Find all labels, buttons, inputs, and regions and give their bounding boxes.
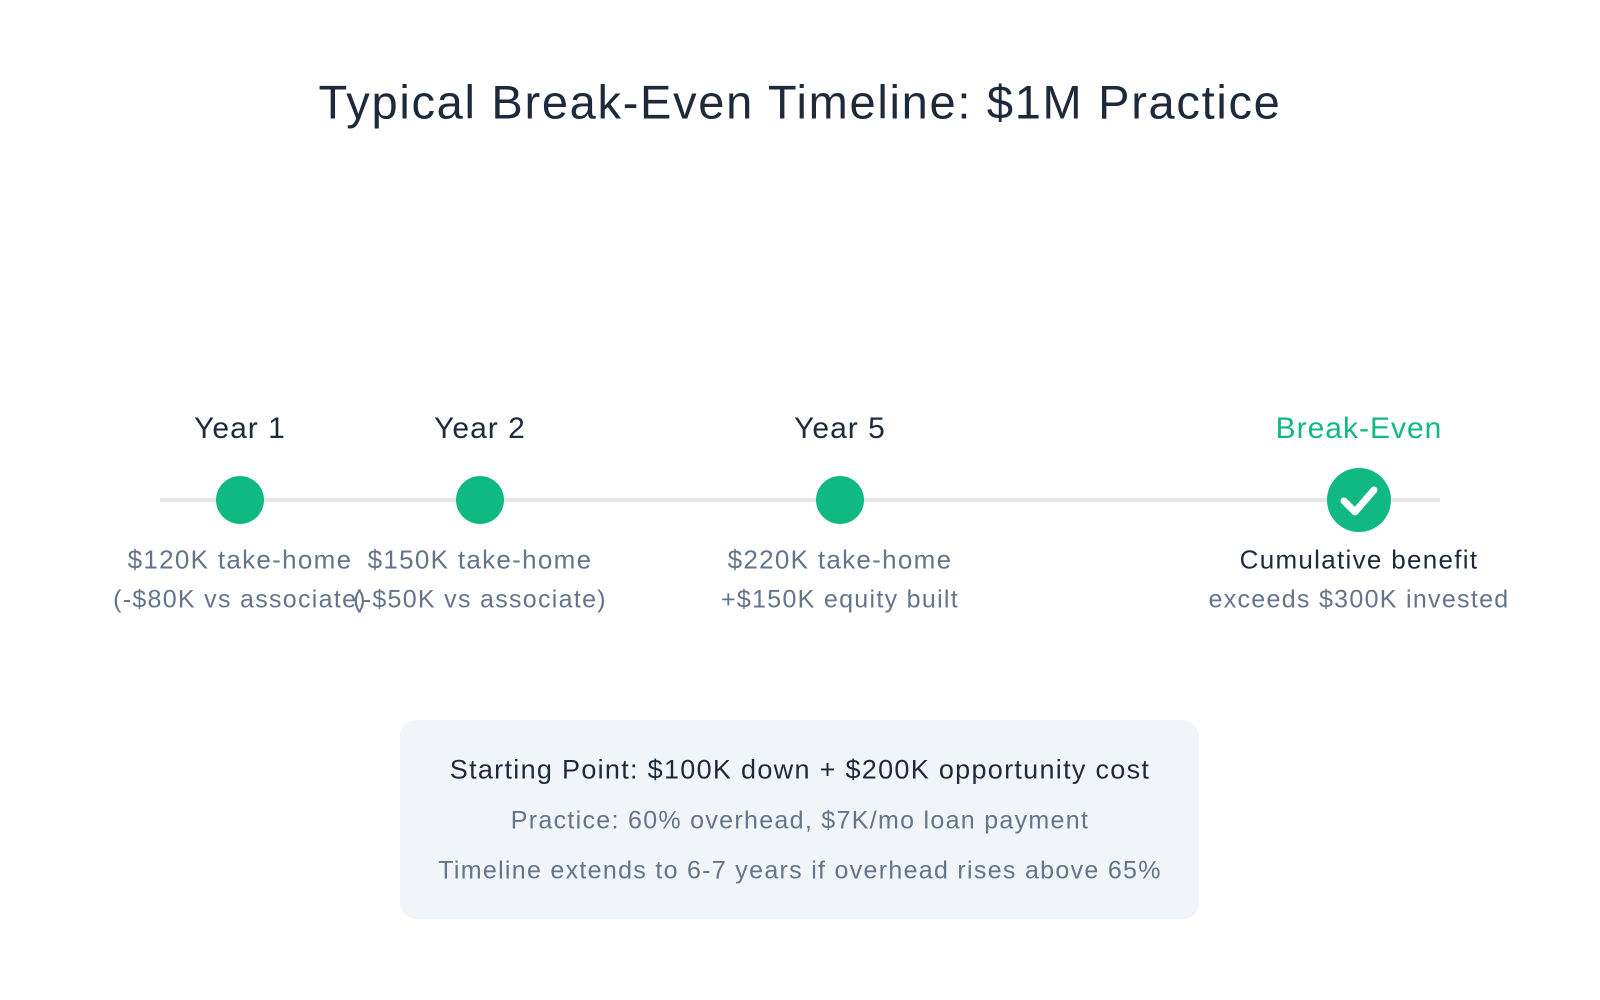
timeline: (-$50K vs associate): [353, 586, 607, 614]
timeline: $220K take-home: [728, 544, 952, 574]
text: Year 2: [434, 412, 526, 445]
milestone: break-even: [1208, 412, 1510, 614]
text: Year 1: [194, 412, 286, 445]
info box: Timeline extends to 6-7 years if overhead rises above 65%: [438, 856, 1162, 884]
title: Typical Break-Even Timeline: $1M Practice: [318, 76, 1282, 128]
timeline: exceeds $300K invested: [1208, 586, 1510, 614]
timeline: +$150K equity built: [721, 586, 959, 614]
milestone: year 2: [353, 412, 607, 614]
timeline: Cumulative benefit: [1240, 544, 1478, 574]
milestone: year 5: [721, 412, 959, 614]
icon: check circle: [1327, 468, 1391, 532]
info box: Starting Point: $100K down + $200K opportunity cost: [450, 754, 1150, 784]
text: Break-Even: [1276, 412, 1442, 445]
info box: [400, 720, 1199, 919]
info box: Practice: 60% overhead, $7K/mo loan payment: [511, 806, 1089, 834]
timeline line: [160, 498, 1440, 502]
timeline: $120K take-home: [128, 544, 352, 574]
timeline: $150K take-home: [368, 544, 592, 574]
text: Year 5: [794, 412, 886, 445]
timeline: (-$80K vs associate): [113, 586, 367, 614]
timeline: [113, 412, 1510, 614]
milestone: year 1: [113, 412, 367, 614]
